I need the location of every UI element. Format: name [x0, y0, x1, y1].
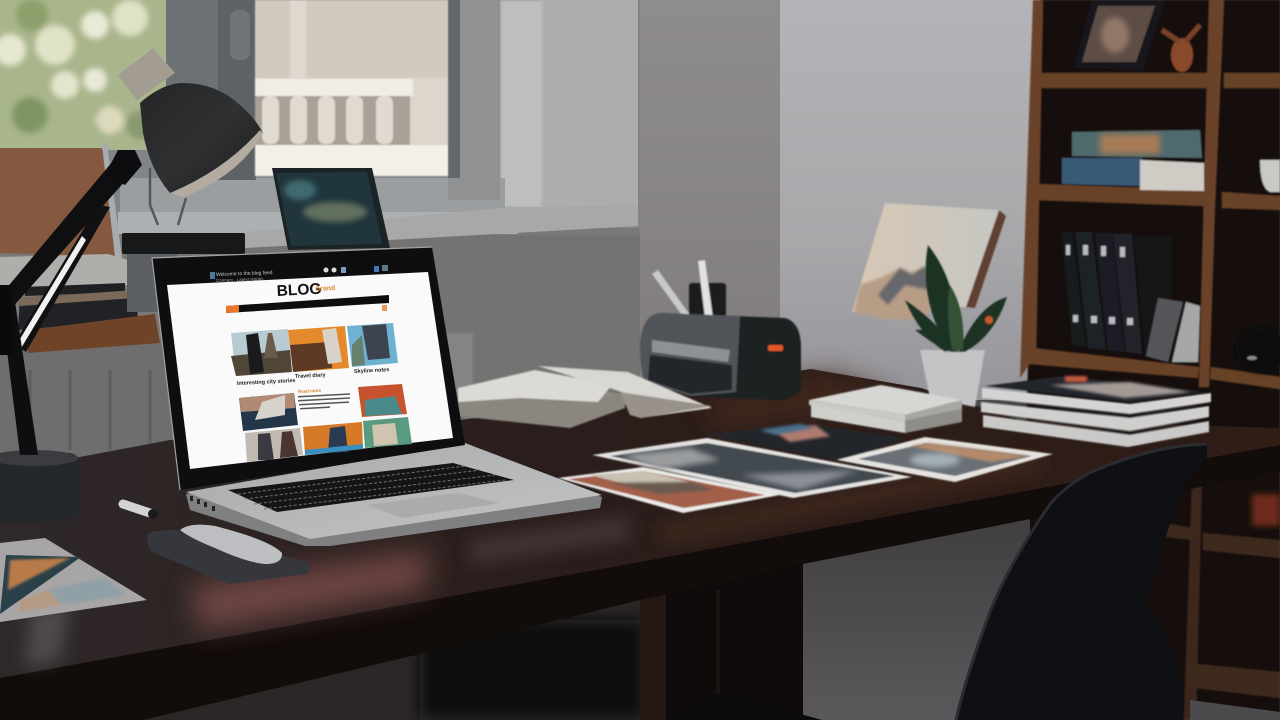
plant in white pot [905, 245, 1007, 407]
printer with pens [640, 260, 801, 400]
desk reflections [25, 375, 1040, 668]
desk top [0, 369, 1280, 678]
print: orange landscape [558, 467, 780, 513]
left shelf with wood board and books [0, 143, 172, 460]
article captions: Interesting city stories [237, 378, 296, 387]
trackpad [367, 493, 500, 518]
white cup [1260, 160, 1280, 192]
framed canvas print [852, 203, 1006, 320]
article captions: Skyline notes [354, 367, 390, 375]
nav bar [226, 295, 389, 313]
open book [458, 366, 712, 428]
window reveal [540, 0, 638, 225]
laptop base deck [186, 445, 602, 546]
marker pen [123, 504, 158, 519]
floor and under-desk wall [0, 500, 1280, 720]
stack of white books [809, 385, 962, 433]
window frame [166, 0, 256, 182]
laptop screen: blog page: brand [316, 285, 336, 293]
desk front edge [0, 443, 1280, 720]
lamp base [0, 450, 81, 522]
laptop screen: blog page [167, 265, 453, 469]
figurine [1162, 25, 1200, 72]
shelves [1030, 73, 1280, 389]
blog thumbnails [231, 323, 412, 462]
desk leg [640, 555, 803, 720]
left upright [1020, 0, 1043, 378]
laptop lid [152, 247, 465, 490]
upright black books [1062, 232, 1172, 354]
print: large grey scene [592, 438, 912, 498]
office chair [677, 444, 1207, 720]
scattered photo prints [558, 423, 1053, 513]
browser toolbar text: Welcome to the blog feed [216, 270, 273, 278]
right stack of magazines [981, 376, 1211, 447]
red object low shelf [1252, 494, 1280, 526]
dark object on shelf [1236, 328, 1280, 372]
mouse and mouse pad [147, 525, 310, 584]
balcony view pane [255, 0, 448, 176]
article body: Read more [298, 388, 322, 394]
tablet on sill [272, 168, 390, 250]
laptop screen: blog page: Connect · Latest stories [216, 276, 264, 283]
small picture frames [1146, 298, 1200, 362]
laptop [152, 247, 602, 546]
stacked books [0, 254, 138, 330]
lamp shade [140, 83, 263, 198]
desk [0, 369, 1280, 720]
books lying on shelf [1062, 130, 1204, 191]
blog logo: BLOG [276, 281, 322, 300]
browser toolbar icons [210, 265, 388, 279]
window [0, 0, 640, 248]
back walls [0, 0, 1040, 470]
framed photo on shelf [1074, 0, 1165, 70]
article captions: Travel diary [295, 372, 327, 380]
pen holder with pens [652, 260, 726, 318]
window sill [245, 205, 638, 248]
lamp arms [0, 150, 142, 455]
article captions [237, 367, 390, 387]
foliage pane [0, 0, 168, 150]
middle upright [1199, 0, 1224, 387]
lamp cap [118, 48, 175, 100]
article body [298, 388, 350, 409]
notebooks at lower left [0, 538, 147, 622]
wood shelf [28, 314, 160, 353]
print: back dark portrait [705, 423, 905, 461]
side ports [190, 496, 215, 511]
black box with wire stand [122, 168, 245, 312]
print: right warm portrait [837, 437, 1053, 482]
keyboard [228, 463, 514, 512]
desk lamp [0, 48, 263, 522]
bookcase [1020, 0, 1280, 720]
